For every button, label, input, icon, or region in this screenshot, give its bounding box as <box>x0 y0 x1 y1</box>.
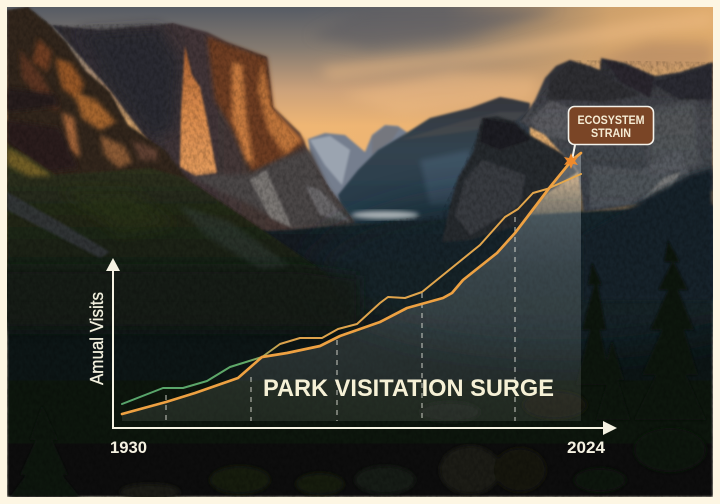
distant pale mountains <box>306 124 408 204</box>
lower visitation line orange <box>122 153 581 414</box>
callout: ecosystem strain sign: ECOSYSTEM <box>578 113 644 127</box>
y axis label: Amual Visits <box>87 292 107 385</box>
translucent area under visitation curve <box>122 153 581 421</box>
callout: ecosystem strain sign: STRAIN <box>591 126 631 140</box>
upper visitation line green to orange <box>122 174 581 404</box>
sky <box>7 7 713 297</box>
blue mid-distance ridge <box>338 97 530 225</box>
green forested slope <box>0 144 360 330</box>
start year label: 1930 <box>110 438 147 457</box>
end year label: 2024 <box>567 438 606 457</box>
el capitan cliff <box>52 23 355 240</box>
callout: ecosystem strain sign <box>568 106 654 160</box>
dark buttress cliff <box>442 116 578 242</box>
icon: orange impact star <box>564 153 578 169</box>
y axis with arrow <box>106 258 120 429</box>
x axis with arrow <box>112 421 617 435</box>
dark valley floor and forest <box>7 190 720 497</box>
left sunlit mountain <box>7 7 188 272</box>
title: PARK VISITATION SURGE <box>263 375 554 402</box>
right granite massif <box>520 58 713 212</box>
conifer slope below the massif <box>624 166 713 301</box>
foreground conifers <box>10 240 706 497</box>
chart: annual visits 1930 to 2024 <box>87 106 654 457</box>
foreground tree canopy <box>120 391 706 500</box>
dashed year markers <box>166 217 515 421</box>
valley mist <box>351 211 419 219</box>
